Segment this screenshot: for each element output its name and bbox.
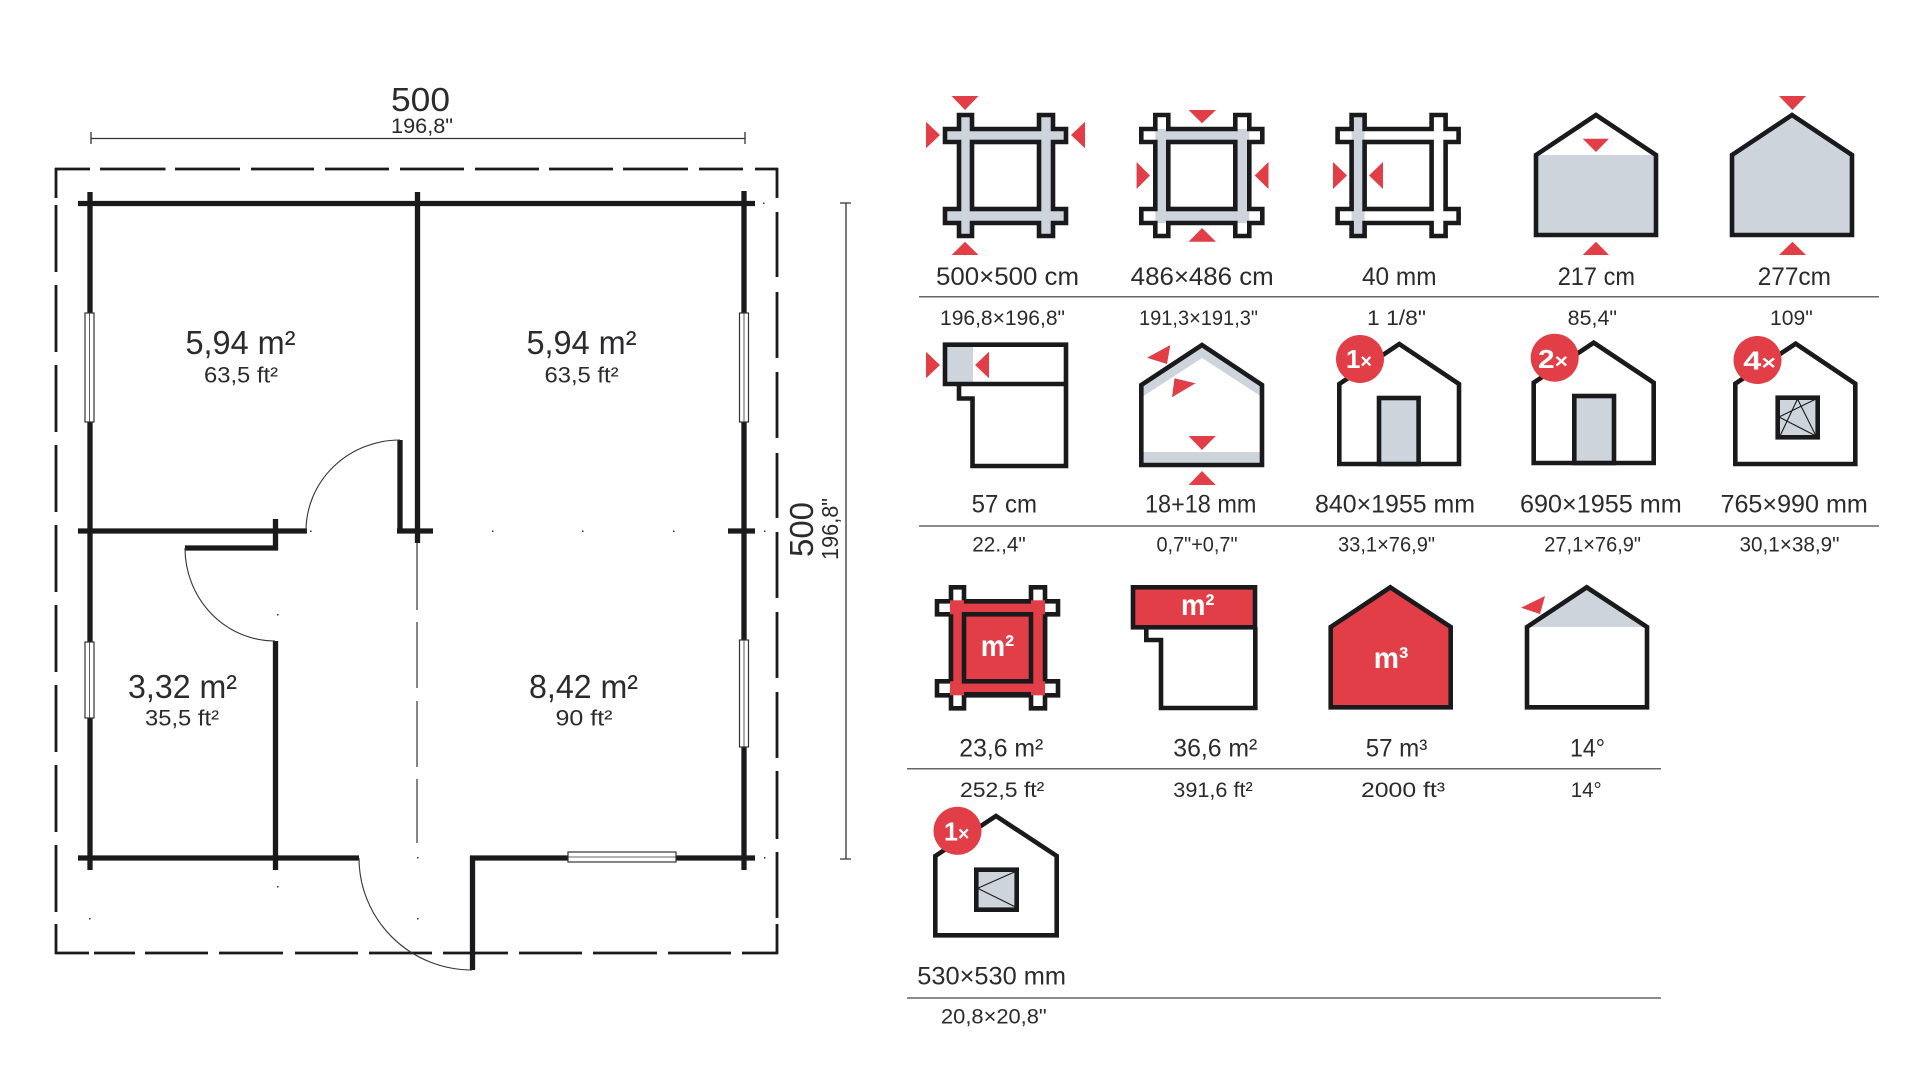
spec: main door: 33,1×76,9"	[1338, 534, 1435, 556]
spec: interior doors: 27,1×76,9"	[1544, 534, 1641, 556]
room label: bottom left: 35,5 ft²	[145, 706, 219, 730]
spec: outer footprint	[926, 96, 1085, 330]
spec: volume: m³	[1374, 642, 1408, 675]
spec: roof area: 391,6 ft²	[1173, 779, 1253, 802]
badge: 2×	[1531, 334, 1579, 382]
top dimension: 500	[391, 81, 450, 118]
roof overhang dashed outline	[55, 168, 778, 954]
badge: 1×	[934, 807, 982, 855]
spec: roof pitch: 14°	[1571, 779, 1602, 802]
room label: bottom left	[128, 668, 237, 730]
panel: floor plan	[55, 81, 851, 970]
spec: interior doors	[1520, 334, 1682, 556]
spec: wall thickness: 40 mm	[1362, 263, 1436, 291]
spec: inner footprint	[1131, 110, 1274, 330]
room label: bottom right	[529, 668, 638, 730]
spec: roof overhang	[926, 345, 1066, 556]
spec: volume: 2000 ft³	[1361, 779, 1445, 802]
spec: ridge height	[1732, 96, 1852, 330]
spec: roof and floor boards	[1141, 345, 1262, 556]
right dimension: 196,8"	[817, 498, 843, 560]
room label: top right: 5,94 m²	[526, 324, 637, 361]
room label: top left: 5,94 m²	[186, 324, 296, 361]
spec: floor area: 252,5 ft²	[960, 779, 1044, 802]
spec: roof overhang: 57 cm	[972, 490, 1037, 518]
spec: roof area	[1133, 587, 1257, 802]
room label: top right: 63,5 ft²	[544, 362, 618, 388]
spec: inner footprint: 486×486 cm	[1131, 263, 1274, 291]
spec: roof area: 36,6 m²	[1173, 735, 1257, 763]
right dimension	[783, 203, 851, 859]
top dimension: 196,8"	[391, 115, 453, 138]
spec: windows: 765×990 mm	[1720, 490, 1868, 518]
spec: ridge height: 109"	[1770, 307, 1813, 330]
row dividers	[907, 297, 1879, 998]
right dimension: 500	[783, 502, 820, 557]
spec: floor area: 23,6 m²	[959, 735, 1043, 763]
log walls	[78, 191, 755, 970]
door swings	[185, 440, 472, 970]
spec: floor area	[937, 587, 1058, 802]
windows	[85, 313, 748, 862]
badge: 4×: 4×	[1743, 345, 1776, 375]
spec: volume	[1331, 587, 1451, 802]
spec: main door: 840×1955 mm	[1315, 490, 1475, 518]
top dimension	[91, 81, 745, 144]
spec: roof area: m²	[1181, 589, 1215, 622]
room label: top right	[526, 324, 637, 388]
spec: roof and floor boards: 18+18 mm	[1145, 490, 1256, 518]
spec: windows: 30,1×38,9"	[1740, 534, 1840, 556]
spec: small window: 530×530 mm	[917, 962, 1066, 990]
spec: ridge height: 277cm	[1758, 263, 1831, 291]
room label: top left	[186, 324, 296, 388]
interior thin dashed line	[416, 543, 418, 843]
spec: floor area: m²	[981, 630, 1014, 663]
spec: small window: 20,8×20,8"	[941, 1006, 1047, 1028]
spec: wall thickness	[1333, 115, 1459, 330]
panel: specification icons	[907, 96, 1879, 1028]
spec: wall height: 217 cm	[1558, 263, 1635, 291]
room label: top left: 63,5 ft²	[204, 362, 278, 388]
spec: roof and floor boards: 0,7"+0,7"	[1156, 534, 1238, 556]
spec: windows	[1720, 336, 1868, 556]
spec: wall height: 85,4"	[1568, 307, 1617, 330]
badge: 1×	[1336, 335, 1384, 383]
spec: main door	[1315, 335, 1475, 556]
spec: roof pitch: 14°	[1570, 735, 1605, 763]
badge: 4×	[1734, 336, 1782, 384]
spec: wall thickness: 1 1/8"	[1367, 307, 1426, 330]
spec: roof overhang: 22.,4"	[972, 534, 1026, 556]
badge: 1×: 1×	[944, 817, 969, 847]
spec: small window	[917, 807, 1066, 1028]
spec: roof pitch	[1521, 587, 1647, 802]
spec: wall height	[1536, 115, 1656, 330]
room label: bottom right: 8,42 m²	[529, 668, 638, 705]
badge: 2×: 2×	[1538, 344, 1568, 374]
survey dots	[89, 202, 766, 920]
spec: outer footprint: 196,8×196,8"	[940, 307, 1065, 330]
room label: bottom left: 3,32 m²	[128, 668, 237, 705]
spec: volume: 57 m³	[1366, 735, 1427, 763]
badge: 1×: 1×	[1346, 344, 1372, 374]
spec: inner footprint: 191,3×191,3"	[1139, 307, 1258, 330]
spec: outer footprint: 500×500 cm	[936, 263, 1079, 291]
room label: bottom right: 90 ft²	[556, 706, 612, 730]
spec: interior doors: 690×1955 mm	[1520, 490, 1682, 518]
